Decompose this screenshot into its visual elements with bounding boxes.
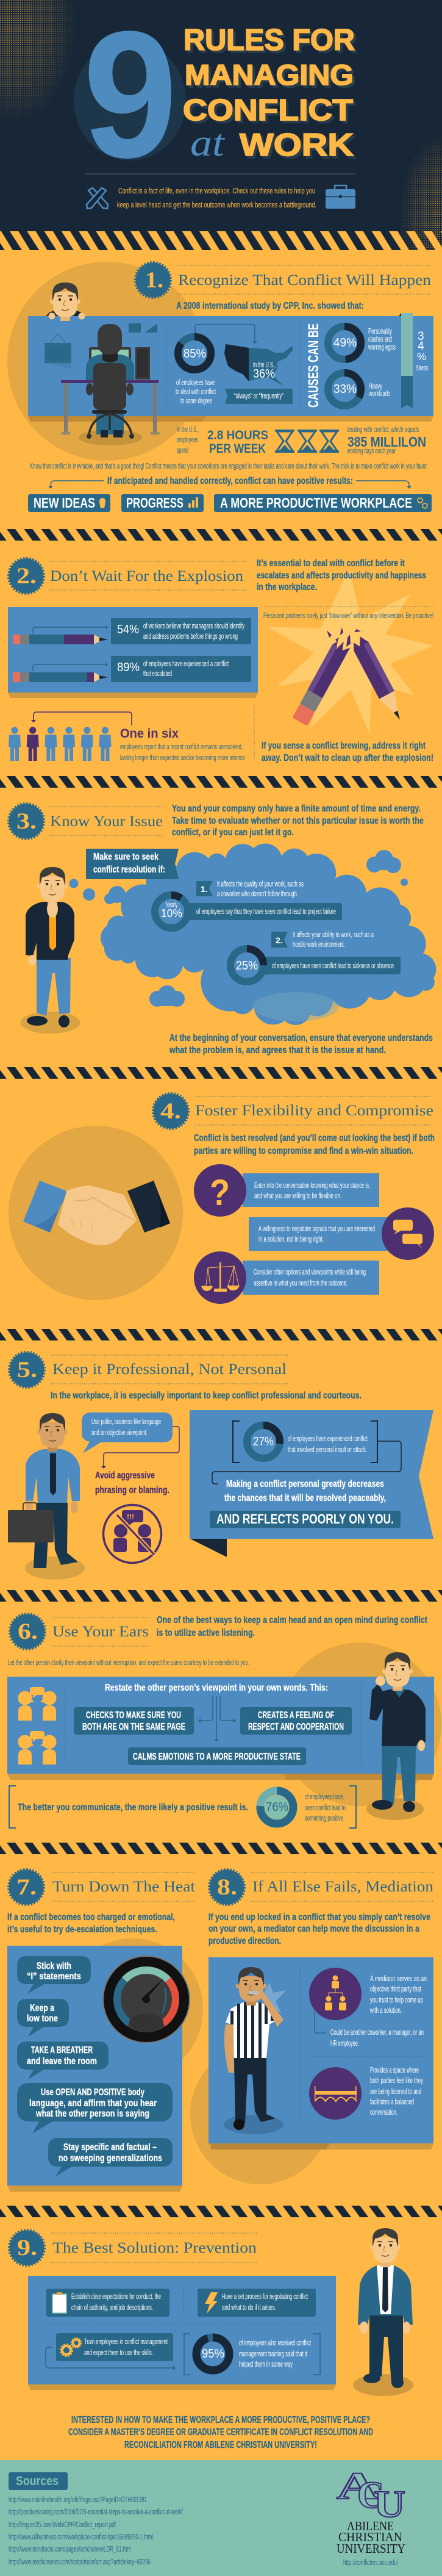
stat box: 54 percent bbox=[111, 618, 251, 644]
people pictogram: one in six bbox=[9, 712, 132, 761]
speech bubble: polite language: and an objective viewpoint. bbox=[91, 1428, 148, 1437]
broken pencil illustration bbox=[292, 628, 407, 726]
stat box: 89 percent: of employees have experienced a conflict bbox=[143, 660, 229, 668]
header grain texture bbox=[0, 0, 442, 251]
stat: hours per week: PER WEEK bbox=[209, 442, 266, 456]
intro text bbox=[209, 1912, 430, 1946]
section 3: know your issue bbox=[9, 804, 436, 1056]
box: respect bbox=[240, 1707, 352, 1735]
intro text: conflict, or if you can just let it go. bbox=[172, 827, 294, 838]
intro text: is to utilize active listening. bbox=[157, 1628, 255, 1638]
US map: In the U.S., bbox=[253, 361, 276, 369]
badge 4 bbox=[153, 1093, 188, 1129]
US map: 36% bbox=[253, 367, 275, 381]
icon: briefcase bbox=[326, 185, 355, 209]
bracketed stat: 95 percent: 95% bbox=[202, 2347, 224, 2361]
tip: clear expectations: Establish clear expectations for conduct, the bbox=[71, 2292, 161, 2301]
stat: hours per week: In the U.S., bbox=[177, 425, 199, 434]
arrow to avoid aggressive bbox=[101, 1427, 179, 1469]
closing text bbox=[169, 1033, 433, 1056]
mediator description: with a solution. bbox=[369, 2006, 402, 2015]
stat: 385 million days: 385 MILLILON bbox=[348, 434, 426, 450]
tip: set process bbox=[198, 2289, 316, 2317]
tip: willingness to negotiate bbox=[249, 1207, 434, 1260]
point 1: a coworker who doesn’t follow through. bbox=[217, 890, 298, 898]
intro text: keep a level head and get the best outcome when work becomes a battleground. bbox=[117, 201, 316, 209]
stat box: 89 percent: 89% bbox=[117, 661, 140, 674]
intro text bbox=[7, 1912, 175, 1935]
caption: personality clashes: warring egos bbox=[368, 343, 396, 351]
badge 7: 7. bbox=[16, 1875, 37, 1900]
stat: one in six bbox=[120, 727, 245, 762]
bubble: stay specific: no sweeping generalizations bbox=[59, 2153, 162, 2164]
heading: Know Your Issue bbox=[50, 813, 163, 830]
caption: workloads: workloads bbox=[368, 389, 390, 398]
point 1: 1. bbox=[201, 884, 208, 894]
badge 2: 2. bbox=[16, 564, 37, 589]
icon: org chart bbox=[309, 1968, 362, 2020]
box: same page bbox=[74, 1707, 194, 1735]
study intro: A 2008 international study by CPP, Inc. showed that: bbox=[176, 301, 364, 311]
tag: make sure to seek: Make sure to seek bbox=[93, 852, 159, 862]
box: same page: BOTH ARE ON THE SAME PAGE bbox=[82, 1722, 185, 1732]
blue flag panel bbox=[190, 1410, 433, 1557]
bubble: take a breather: and leave the room bbox=[27, 2056, 97, 2067]
blue stats panel bbox=[28, 316, 433, 422]
arrow: donut to map bbox=[195, 325, 255, 342]
university logo: C bbox=[357, 2475, 384, 2516]
section 6: use your ears bbox=[7, 1614, 441, 1828]
title words: CONFLICT bbox=[183, 94, 353, 127]
heading: The Best Solution: Prevention bbox=[52, 2240, 257, 2256]
heading: Don’t Wait For the Explosion bbox=[50, 568, 244, 585]
donut: 76 percent bbox=[260, 1791, 293, 1824]
bubble: take a breather bbox=[17, 2042, 109, 2079]
tip: train employees: and expect them to use the skills. bbox=[84, 2348, 153, 2357]
mediator space description: facilitates a balanced bbox=[370, 2098, 414, 2106]
caption: workloads: Heavy bbox=[369, 382, 382, 390]
caption: 85 percent: to some degree bbox=[180, 397, 212, 405]
tag: new ideas: NEW IDEAS bbox=[34, 495, 95, 511]
heading: Foster Flexibility and Compromise bbox=[195, 1103, 433, 1119]
blue panel: restate viewpoint bbox=[7, 1677, 434, 1780]
university logo: A bbox=[337, 2466, 378, 2507]
rotated causes can be: CAUSES CAN BE bbox=[305, 323, 322, 408]
tip: consider other options: Consider other options and viewpoints while still being bbox=[254, 1268, 366, 1276]
stat: 25 percent: 25% bbox=[236, 959, 258, 973]
note: Let the other person clarify their viewpoint without interruption, and expect the same courtesy to be extended to you. bbox=[8, 1658, 249, 1667]
badge 6: 6. bbox=[18, 1619, 38, 1644]
arrow: could be another bbox=[315, 2012, 326, 2033]
avoid aggressive text: phrasing or blaming. bbox=[95, 1485, 169, 1495]
point 2: 2. bbox=[276, 935, 283, 945]
point 2 bbox=[271, 930, 374, 949]
speech bubble: polite language: Use polite, business-like language bbox=[91, 1417, 161, 1426]
box: calms emotions: CALMS EMOTIONS TO A MORE PRODUCTIVE STATE bbox=[133, 1752, 301, 1762]
positive results line with arrows bbox=[49, 476, 411, 489]
bookmark bar: stress 34 percent: Stress bbox=[416, 364, 428, 372]
section 4: foster flexibility and compromise bbox=[9, 1093, 435, 1304]
call to action bbox=[68, 2415, 373, 2450]
listening man bbox=[366, 1652, 426, 1820]
man peeking over the panel bbox=[46, 282, 85, 321]
bracketed statement bbox=[9, 1786, 356, 1828]
bracketed stat: 27 percent: that involved personal insult or attack. bbox=[288, 1445, 367, 1454]
intro text: It’s essential to deal with conflict before it bbox=[257, 558, 405, 569]
heading: Keep it Professional, Not Personal bbox=[52, 1361, 287, 1378]
caption: workloads bbox=[368, 382, 390, 398]
badge 7 bbox=[9, 1869, 44, 1905]
banner: reflects poorly: AND REFLECTS POORLY ON YOU. bbox=[216, 1511, 394, 1527]
flow arrows bbox=[198, 1696, 236, 1742]
box: respect: CREATES A FEELING OF bbox=[258, 1710, 334, 1721]
heading: Turn Down The Heat bbox=[52, 1879, 195, 1895]
point 2: It affects your ability to work, such as a bbox=[293, 930, 374, 939]
plus sign: + bbox=[113, 499, 118, 509]
stat: hours per week: spend bbox=[177, 446, 188, 455]
badge 3 bbox=[9, 804, 44, 839]
badge 9: 9. bbox=[17, 2236, 37, 2261]
point 1: It affects the quality of your work, such as bbox=[217, 880, 304, 888]
avoid aggressive text: Avoid aggressive bbox=[95, 1470, 155, 1481]
caption: personality clashes: clashes and bbox=[368, 335, 392, 344]
bracketed stat: 95 percent: management training said that it bbox=[239, 2350, 307, 2358]
caption: 85 percent: to deal with conflict bbox=[176, 387, 216, 396]
stat: hours per week: employees bbox=[177, 436, 198, 444]
mediator description bbox=[369, 1974, 427, 2015]
pencil bar: 54 percent bbox=[13, 625, 108, 644]
banner: always or frequently bbox=[225, 389, 293, 404]
small clouds bbox=[70, 850, 408, 1007]
badge 8 bbox=[209, 1869, 244, 1905]
connector arrow bbox=[212, 1441, 401, 1484]
donut: 49 percent bbox=[328, 326, 361, 359]
point 1 bbox=[196, 880, 304, 898]
mediator space description bbox=[370, 2066, 423, 2117]
donut: 33 percent: 33% bbox=[333, 383, 357, 396]
tip: consider other options: assertive in what you need from the outcome. bbox=[254, 1279, 348, 1287]
mediator examples bbox=[330, 2028, 424, 2048]
caption: 76 percent: of employees have bbox=[305, 1793, 343, 1801]
bracketed stat: 27 percent: 27% bbox=[253, 1435, 274, 1448]
title word at: at bbox=[190, 123, 226, 164]
stat box: 89 percent bbox=[111, 656, 251, 682]
caption: personality clashes: Personality bbox=[368, 327, 392, 336]
university logo: ABILENE bbox=[347, 2519, 394, 2533]
closing advice bbox=[262, 741, 433, 763]
thought cloud bbox=[101, 844, 436, 1025]
bracketed stat: 95 percent: helped them in some way bbox=[239, 2360, 293, 2369]
tip: clear expectations bbox=[46, 2289, 169, 2317]
bookmark bar: stress 34 percent: 4 bbox=[418, 340, 424, 353]
mediator examples: HR employee. bbox=[330, 2039, 359, 2048]
intro text bbox=[117, 187, 316, 209]
intro text: productive direction. bbox=[209, 1936, 281, 1946]
stat: hours per week: 2.8 HOURS bbox=[207, 428, 268, 442]
stat: nearly 10 percent: Nearly bbox=[166, 901, 177, 909]
icon: talking pairs bbox=[18, 1687, 56, 1765]
thinking man bbox=[21, 867, 80, 1034]
source links: http://img.en25.com/Web/CPP/Conflict_report.pdf bbox=[9, 2520, 116, 2529]
bookmark bar: stress 34 percent bbox=[399, 313, 428, 408]
badge 5 bbox=[9, 1352, 45, 1387]
stat box: 54 percent: of workers believe that managers should identify bbox=[143, 622, 244, 630]
blue stats panel bbox=[8, 607, 258, 698]
university logo: http://conflictres.acu.edu/ bbox=[343, 2558, 398, 2567]
source links: http://www.allbusiness.com/workplace-conflict-tips/16689350-1.html bbox=[9, 2533, 153, 2541]
bubble: low tone: low tone bbox=[27, 2013, 58, 2024]
stat: 385 million days: working days each year bbox=[346, 447, 396, 455]
handshake illustration bbox=[9, 1126, 183, 1300]
heading: If All Else Fails, Mediation bbox=[252, 1879, 434, 1895]
section 5: keep it professional, not personal bbox=[8, 1352, 433, 1580]
tip: set process: and what to do if it arises. bbox=[222, 2303, 276, 2312]
speech bubble: polite language bbox=[82, 1412, 173, 1453]
section 2: don't wait for the explosion bbox=[8, 558, 434, 763]
header background bbox=[0, 0, 442, 231]
explosion star bbox=[266, 569, 434, 734]
intro text: in the workplace. bbox=[257, 582, 317, 592]
university logo: UNIVERSITY bbox=[337, 2541, 405, 2556]
pencil bar: 89 percent bbox=[13, 663, 108, 682]
tip: clear expectations: chain of authority, and job descriptions. bbox=[71, 2303, 153, 2312]
intro text: In the workplace, it is especially important to keep conflict professional and courteous. bbox=[51, 1391, 362, 1401]
intro text: If a conflict becomes too charged or emotional, bbox=[7, 1912, 175, 1923]
tag: make sure to seek bbox=[86, 849, 179, 879]
stat: one in six: One in six bbox=[120, 727, 179, 741]
stat: 385 million days bbox=[346, 425, 426, 455]
sources tag: Sources bbox=[16, 2474, 59, 2488]
title words: RULES FOR bbox=[184, 24, 355, 57]
university logo: CHRISTIAN bbox=[338, 2530, 402, 2544]
caption: 85 percent: of employees have bbox=[176, 378, 215, 387]
icon: crossed pencils bbox=[87, 188, 108, 209]
referee bbox=[224, 1967, 287, 2134]
badge 4: 4. bbox=[160, 1099, 181, 1124]
positive results line with arrows: If anticipated and handled correctly, conflict can have positive results: bbox=[107, 476, 353, 486]
bubble: take a breather: TAKE A BREATHER bbox=[31, 2045, 93, 2056]
tip: train employees bbox=[46, 2333, 176, 2370]
bubble: stay specific: Stay specific and factual – bbox=[63, 2142, 157, 2153]
heading: Use Your Ears bbox=[52, 1624, 149, 1640]
section 1: recognize that conflict will happen bbox=[7, 262, 433, 512]
badge 5: 5. bbox=[17, 1358, 37, 1383]
bookmark bar: stress 34 percent: 3 bbox=[418, 330, 424, 343]
intro text bbox=[172, 804, 424, 838]
title words: MANAGING bbox=[185, 59, 354, 91]
footer: sources and logo bbox=[0, 2460, 442, 2576]
intro text bbox=[157, 1615, 427, 1638]
warning text: Making a conflict personal greatly decreases bbox=[226, 1479, 384, 1489]
tip: know your stance bbox=[194, 1164, 379, 1217]
stat: 25 percent bbox=[230, 949, 401, 982]
icon: hourglasses bbox=[275, 430, 339, 453]
badge 9 bbox=[9, 2230, 45, 2265]
donut: 76 percent: 76% bbox=[266, 1801, 288, 1814]
stat box: 54 percent: 54% bbox=[117, 623, 139, 636]
caption: personality clashes bbox=[368, 327, 396, 351]
heading: Recognize That Conflict Will Happen bbox=[178, 272, 432, 289]
man in suit bbox=[353, 2228, 413, 2396]
point 2: hostile work environment. bbox=[293, 940, 345, 949]
box: respect: RESPECT AND COOPERATION bbox=[248, 1722, 344, 1732]
icon: no arguing: !!! bbox=[127, 1513, 134, 1521]
bracketed stat: 27 percent bbox=[233, 1421, 377, 1462]
call to action: RECONCILIATION FROM ABILENE CHRISTIAN UNIVERSITY! bbox=[124, 2440, 317, 2450]
stat: nearly 10 percent bbox=[155, 895, 342, 928]
intro text bbox=[257, 558, 426, 592]
gauge bbox=[102, 1955, 190, 2043]
source links: http://www.medicinenet.com/script/main/art.asp?articlekey=60206 bbox=[9, 2558, 151, 2566]
caption: 76 percent: seen conflict lead to bbox=[305, 1804, 346, 1812]
tip: consider other options bbox=[194, 1251, 379, 1304]
badge 6 bbox=[10, 1614, 45, 1649]
source links: http://www.mainlinehealth.org/oth/Page.asp?PageID=OTH001381 bbox=[9, 2495, 147, 2504]
tip: know your stance: Enter into the conversation knowing what your stance is, bbox=[254, 1181, 370, 1190]
caption: 76 percent bbox=[305, 1793, 346, 1822]
stat: one in six: lasting longer than expected and/or becoming more intense bbox=[120, 754, 245, 762]
tag: make sure to seek: conflict resolution if: bbox=[93, 865, 165, 875]
stat: one in six: employees report that a recent conflict remains unresolved, bbox=[120, 743, 243, 751]
bubble: body language: Use OPEN AND POSITIVE body bbox=[41, 2087, 144, 2098]
badge 8: 8. bbox=[217, 1875, 237, 1900]
bracketed stat: 27 percent: of employees have experienced conflict bbox=[288, 1434, 368, 1443]
businessman with briefcase bbox=[8, 1413, 85, 1580]
box: same page: CHECKS TO MAKE SURE YOU bbox=[86, 1710, 181, 1721]
title words: WORK bbox=[240, 128, 354, 163]
box: calms emotions bbox=[128, 1747, 306, 1765]
bubble: I statements: Stick with bbox=[37, 1961, 71, 1971]
header title block bbox=[74, 0, 355, 195]
section 9: the best solution, prevention bbox=[9, 2228, 413, 2450]
bracketed stat: 95 percent: of employees who received conflict bbox=[239, 2339, 311, 2347]
stat box: 54 percent: and address problems before things go wrong bbox=[143, 632, 238, 641]
donut: 85 percent: 85% bbox=[184, 347, 206, 361]
donut: 85 percent bbox=[178, 337, 211, 370]
bubble: low tone bbox=[17, 1999, 69, 2037]
bubble: body language: what the other person is saying bbox=[35, 2109, 149, 2119]
tip: set process: Have a set process for negotiating conflict bbox=[222, 2292, 308, 2301]
tip: train employees: Train employees in conflict management bbox=[84, 2337, 168, 2346]
tip: know your stance: ? bbox=[210, 1172, 230, 1213]
source links: http://positivesharing.com/2006/07/5-essential-steps-to-resolve-a-conflict-at-work/ bbox=[9, 2508, 183, 2516]
badge 3: 3. bbox=[16, 809, 37, 834]
source links bbox=[9, 2495, 183, 2566]
badge 1: 1. bbox=[145, 268, 163, 293]
blue panel: prevention bbox=[28, 2276, 336, 2390]
stat: nearly 10 percent: of employees say that they have seen conflict lead to project failure bbox=[196, 907, 336, 916]
US map bbox=[224, 344, 293, 386]
sources tag bbox=[9, 2472, 68, 2490]
bubble: body language bbox=[17, 2083, 173, 2134]
wall decor bbox=[45, 323, 157, 369]
bubble: body language: language, and affirm that you hear bbox=[29, 2098, 157, 2109]
section 8: if all else fails, mediation bbox=[209, 1869, 434, 2150]
stat: nearly 10 percent: 10% bbox=[161, 907, 182, 919]
icon: no arguing bbox=[104, 1505, 161, 1563]
bracketed stat: 95 percent bbox=[184, 2334, 320, 2375]
bubble: low tone: Keep a bbox=[30, 2003, 54, 2013]
intro text: it’s useful to try de-escalation techniques. bbox=[7, 1924, 157, 1935]
university logo: U bbox=[374, 2484, 405, 2525]
intro text bbox=[194, 1133, 435, 1156]
warning text bbox=[224, 1479, 386, 1503]
avoid aggressive text bbox=[95, 1470, 169, 1495]
title words bbox=[183, 24, 355, 163]
blue panel: de-escalation bbox=[7, 1946, 190, 2192]
bubble: I statements bbox=[17, 1956, 91, 1994]
bookmark bar: stress 34 percent: % bbox=[417, 351, 426, 362]
university logo bbox=[337, 2466, 405, 2567]
stat: hours per week bbox=[177, 425, 268, 456]
tag: progress: PROGRESS bbox=[126, 495, 184, 511]
donut: 33 percent bbox=[328, 373, 361, 406]
donut: 49 percent: 49% bbox=[333, 336, 357, 350]
bracketed statement: The better you communicate, the more likely a positive result is. bbox=[18, 1802, 248, 1813]
stat box: 89 percent: that escalated bbox=[143, 669, 172, 678]
caption: 85 percent bbox=[176, 378, 216, 405]
man at desk illustration bbox=[61, 324, 160, 445]
icon: bridge bbox=[309, 2067, 362, 2120]
closing text: what the problem is, and agrees that it is the issue at hand. bbox=[169, 1045, 386, 1056]
blue panel: mediation bbox=[209, 1957, 433, 2150]
mediator space description: conversation. bbox=[370, 2108, 397, 2117]
source links: http://www.mindtools.com/pages/article/newLDR_81.htm bbox=[9, 2545, 131, 2553]
bubble: I statements: “I” statements bbox=[27, 1971, 81, 1982]
plus sign: + bbox=[206, 499, 211, 509]
tip: willingness to negotiate: in a solution, not in being right. bbox=[258, 1235, 324, 1243]
tip: know your stance: and what you are willing to be flexible on. bbox=[254, 1192, 341, 1200]
bubble: stay specific bbox=[48, 2138, 173, 2176]
section 7: turn down the heat bbox=[7, 1869, 330, 2192]
banner: always or frequently: “always” or “frequently” bbox=[234, 392, 283, 400]
restate heading: Restate the other person’s viewpoint in your own words. This: bbox=[105, 1683, 328, 1693]
warning text: the chances that it will be resolved peaceably, bbox=[224, 1493, 386, 1503]
caption: 76 percent: something positive bbox=[305, 1814, 343, 1822]
badge 2 bbox=[9, 558, 44, 594]
intro text: Conflict is a fact of life, even in the workplace. Check out these rules to help you bbox=[118, 187, 315, 195]
badge 1 bbox=[135, 262, 171, 298]
